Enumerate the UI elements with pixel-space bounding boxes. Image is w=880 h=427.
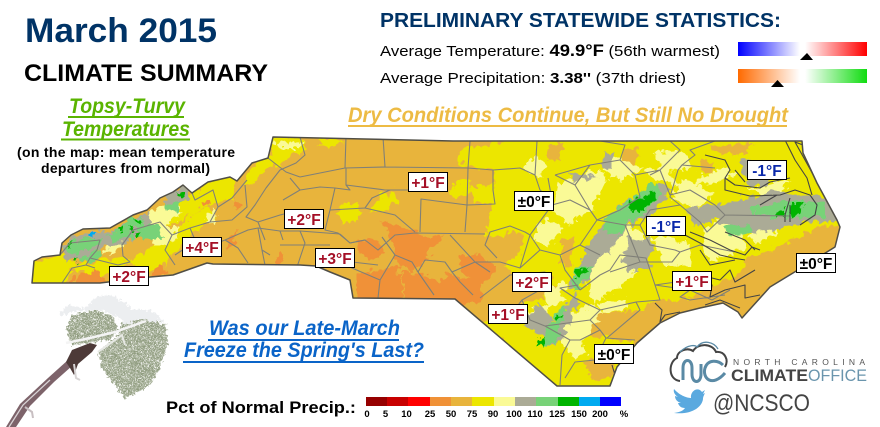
- yellow east: [484, 142, 838, 316]
- title: March 2015: [25, 12, 217, 50]
- label: 0F coast: ±0°F: [800, 256, 832, 273]
- legend: percent of normal precipitation: 50: [446, 409, 456, 420]
- SE gold: [583, 358, 616, 382]
- base: gold 50-75 percent: [35, 138, 840, 346]
- legend: percent of normal precipitation: 0: [364, 409, 370, 420]
- legend: percent of normal precipitation: 150: [571, 409, 587, 420]
- legend: percent of normal precipitation: [166, 397, 629, 420]
- label: -1F northeast: [748, 160, 786, 180]
- legend: percent of normal precipitation: 100: [506, 409, 522, 420]
- county lines: [246, 137, 552, 243]
- map note: (on the map: mean temperature: [17, 144, 235, 160]
- statistic: precipitation: Average Precipitation: 3.38'' (37th driest): [380, 70, 686, 87]
- statistic: temperature: Average Temperature: 49.9°F (56th warmest): [380, 42, 720, 60]
- yellow north patches: [453, 140, 505, 170]
- legend: percent of normal precipitation: Pct of Normal Precip.:: [166, 398, 356, 417]
- logo: NC Climate Office: NORTH CAROLINA: [733, 357, 865, 367]
- heading: temperatures: [61, 95, 190, 141]
- legend: percent of normal precipitation: 25: [425, 409, 436, 420]
- gray: [565, 182, 672, 285]
- label: +2F south: +2°F: [515, 275, 549, 292]
- label: +1F north: +1°F: [411, 175, 445, 192]
- icon: twitter bird: [674, 389, 705, 413]
- twitter handle: @NCSCO: [713, 390, 810, 417]
- label: +2F foothills: +2°F: [287, 212, 321, 229]
- legend: percent of normal precipitation: 110: [527, 409, 543, 420]
- label: -1F central: [646, 216, 686, 236]
- map note: [17, 144, 235, 176]
- heading: freeze: Was our Late-March: [209, 317, 400, 340]
- temperature departure labels: [110, 160, 836, 364]
- green: [535, 190, 804, 343]
- state outline: [32, 137, 840, 386]
- label: -1F central: -1°F: [651, 219, 681, 236]
- map of North Carolina: [20, 130, 855, 400]
- heading: freeze: Freeze the Spring's Last?: [184, 339, 424, 362]
- legend: percent of normal precipitation: 5: [383, 409, 389, 420]
- dark green west: [65, 191, 181, 260]
- gray west: [58, 183, 188, 258]
- legend: percent of normal precipitation: %: [620, 409, 629, 420]
- subtitle: CLIMATE SUMMARY: [24, 60, 268, 87]
- heading: precipitation: Dry Conditions Continue, But Still No Drought: [348, 104, 789, 127]
- orange: [66, 228, 283, 285]
- light green: [537, 180, 825, 345]
- heading: temperatures: Temperatures: [62, 118, 190, 141]
- photo: frosted leaf: [6, 294, 168, 427]
- label: +4F: +4°F: [185, 240, 219, 257]
- estuaries and sounds: [610, 140, 817, 385]
- heading: temperatures: Topsy-Turvy: [69, 95, 186, 118]
- logo: NC Climate Office: [671, 342, 867, 385]
- west yellow: [28, 132, 302, 285]
- label: 0F southeast: ±0°F: [598, 347, 630, 364]
- legend: percent of normal precipitation: 200: [592, 409, 608, 420]
- label: 0F piedmont: ±0°F: [518, 194, 550, 211]
- label: +1F east: +1°F: [675, 274, 709, 291]
- gold patches in NE: [545, 141, 750, 265]
- label: +2F far west: +2°F: [112, 269, 146, 286]
- statistics heading: PRELIMINARY STATEWIDE STATISTICS:: [380, 10, 781, 32]
- west pale yellow: [100, 138, 300, 252]
- legend: percent of normal precipitation: 10: [401, 409, 412, 420]
- precipitation rank bar: [738, 69, 867, 87]
- logo: NC Climate Office: OFFICE: [808, 366, 867, 385]
- heading: freeze: [183, 317, 424, 363]
- logo: NC Climate Office: CLIMATE: [731, 366, 808, 385]
- green west: [60, 200, 178, 260]
- pale yellow: [520, 148, 790, 355]
- label: +3F: +3°F: [318, 251, 352, 268]
- label: -1F northeast: -1°F: [752, 163, 782, 180]
- label: +1F sandhills: +1°F: [491, 307, 525, 324]
- legend: percent of normal precipitation: 75: [467, 409, 478, 420]
- temperature rank bar: [738, 42, 867, 60]
- legend: percent of normal precipitation: 90: [488, 409, 498, 420]
- legend: percent of normal precipitation: 125: [549, 409, 566, 420]
- map note: departures from normal): [41, 160, 210, 176]
- sky patch: [84, 230, 92, 233]
